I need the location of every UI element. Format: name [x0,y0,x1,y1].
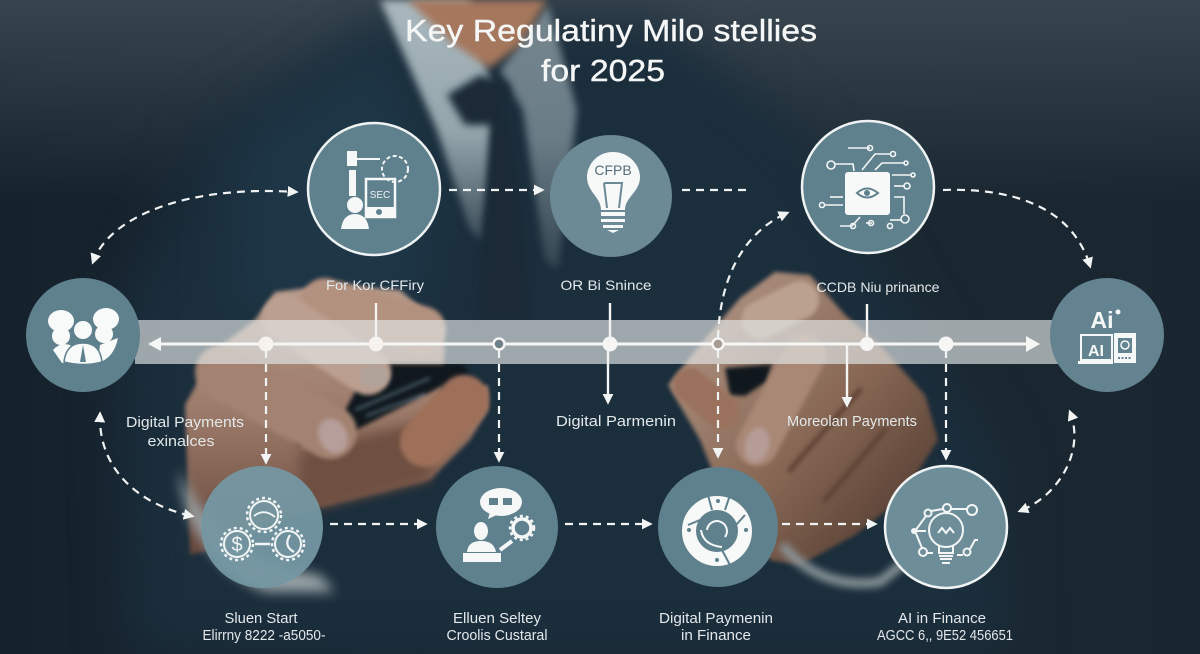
milestone: presenter with speech bubble [436,466,558,588]
milestone: CFPB bulb [550,135,672,257]
milestone: AI: AI [1088,343,1104,360]
timeline axis with nodes [148,336,1040,352]
labels below the timeline: exinalces [148,434,214,450]
labels above the timeline: For Kor CFFiry [326,277,424,293]
labels under the milestone circles: Elirrny 8222 -a5050- [202,628,326,644]
milestone: circuit chip [802,121,934,253]
milestone: AI [1050,278,1164,392]
labels under the milestone circles: AGCC 6,, 9E52 456651 [877,628,1013,644]
connectors from timeline to labels [376,303,867,405]
labels under the milestone circles: Croolis Custaral [446,628,548,644]
milestone: gears with dollar [201,466,323,588]
milestone: CFPB bulb: CFPB [594,162,632,178]
milestone: segmented ring [658,467,778,587]
milestone: SEC: SEC [370,190,390,201]
labels under the milestone circles: Sluen Start [224,611,298,627]
milestone: people group [26,278,140,392]
labels above the timeline: CCDB Niu prinance [816,279,940,295]
labels below the timeline: Digital Payments [126,415,244,431]
milestone: gears with dollar: $ [231,534,243,556]
labels below the timeline [126,414,917,450]
labels under the milestone circles [202,611,1013,644]
right hand pointing [668,272,938,583]
title: for 2025 [541,53,665,88]
labels below the timeline: Moreolan Payments [787,414,917,430]
labels under the milestone circles: Digital Paymenin [659,611,773,627]
milestone: AI: Ai [1090,307,1114,333]
left hand holding pen [178,285,488,592]
dashed arrows between milestones [93,190,1090,524]
milestone: SEC [308,123,440,255]
pen [252,364,470,446]
labels above the timeline [326,277,940,295]
labels below the timeline: Digital Parmenin [556,414,676,430]
timeline band [135,320,1060,364]
title: Key Regulatiny Milo stellies [405,13,817,48]
labels under the milestone circles: Elluen Seltey [453,611,542,627]
title [405,13,817,88]
labels above the timeline: OR Bi Snince [560,277,652,293]
labels under the milestone circles: in Finance [681,628,751,644]
labels under the milestone circles: AI in Finance [898,611,986,627]
milestone: lightbulb network [885,466,1007,588]
